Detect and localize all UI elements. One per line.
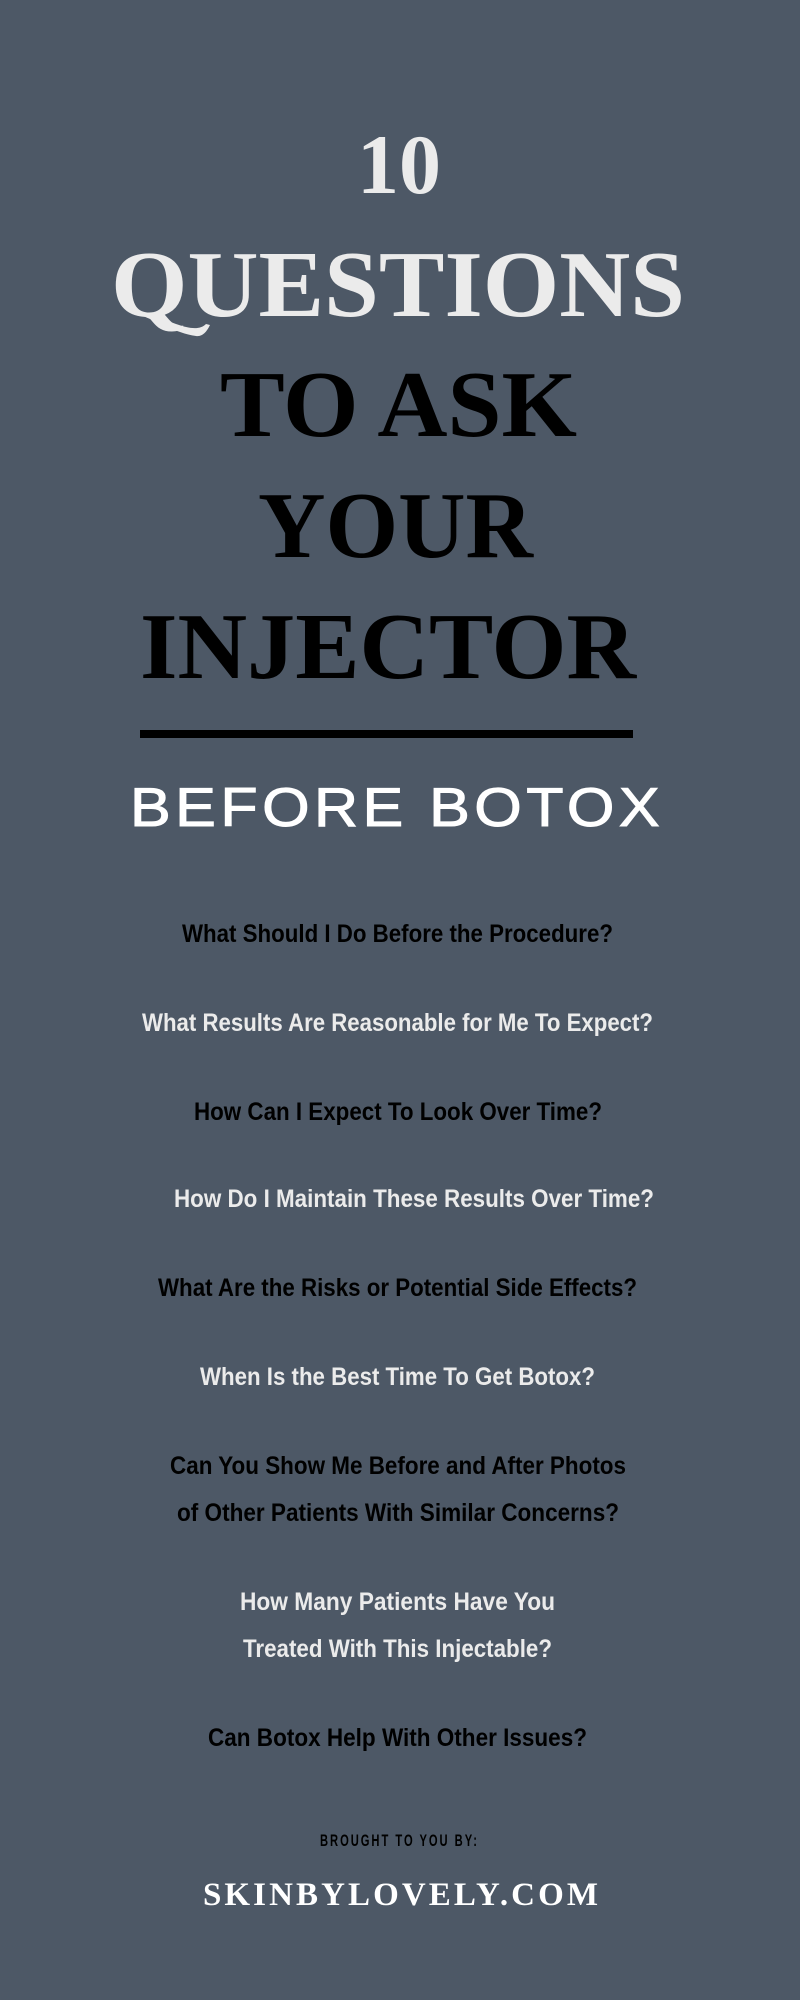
question 5: What Are the Risks or Potential Side Effects? bbox=[158, 1274, 637, 1302]
question 8: How Many Patients Have You bbox=[240, 1588, 555, 1616]
question 7 bbox=[170, 1452, 626, 1527]
title line: to ask: TO ASK bbox=[220, 353, 577, 457]
title line: your: YOUR bbox=[258, 474, 534, 578]
Q tail swash bbox=[135, 313, 210, 336]
brought to you by label: BROUGHT TO YOU BY: bbox=[320, 1831, 479, 1850]
title bbox=[111, 118, 685, 699]
question 7: Can You Show Me Before and After Photos bbox=[170, 1452, 626, 1480]
question 4: How Do I Maintain These Results Over Time? bbox=[174, 1185, 654, 1213]
title underline rule bbox=[140, 730, 633, 738]
question 2: What Results Are Reasonable for Me To Expect? bbox=[142, 1009, 653, 1037]
title line: 10: 10 bbox=[357, 118, 441, 212]
question 8 bbox=[240, 1588, 555, 1663]
question 7: of Other Patients With Similar Concerns? bbox=[177, 1499, 619, 1527]
title line: questions: QUESTIONS bbox=[111, 233, 685, 337]
title line: injector: INJECTOR bbox=[140, 595, 637, 699]
question 8: Treated With This Injectable? bbox=[243, 1635, 552, 1663]
question 1: What Should I Do Before the Procedure? bbox=[182, 920, 613, 948]
question 3: How Can I Expect To Look Over Time? bbox=[194, 1098, 602, 1126]
website url: SKINBYLOVELY.COM bbox=[203, 1877, 603, 1913]
questions list bbox=[142, 920, 654, 1752]
subtitle: BEFORE BOTOX bbox=[130, 776, 664, 838]
question 9: Can Botox Help With Other Issues? bbox=[208, 1724, 587, 1752]
question 6: When Is the Best Time To Get Botox? bbox=[200, 1363, 595, 1391]
